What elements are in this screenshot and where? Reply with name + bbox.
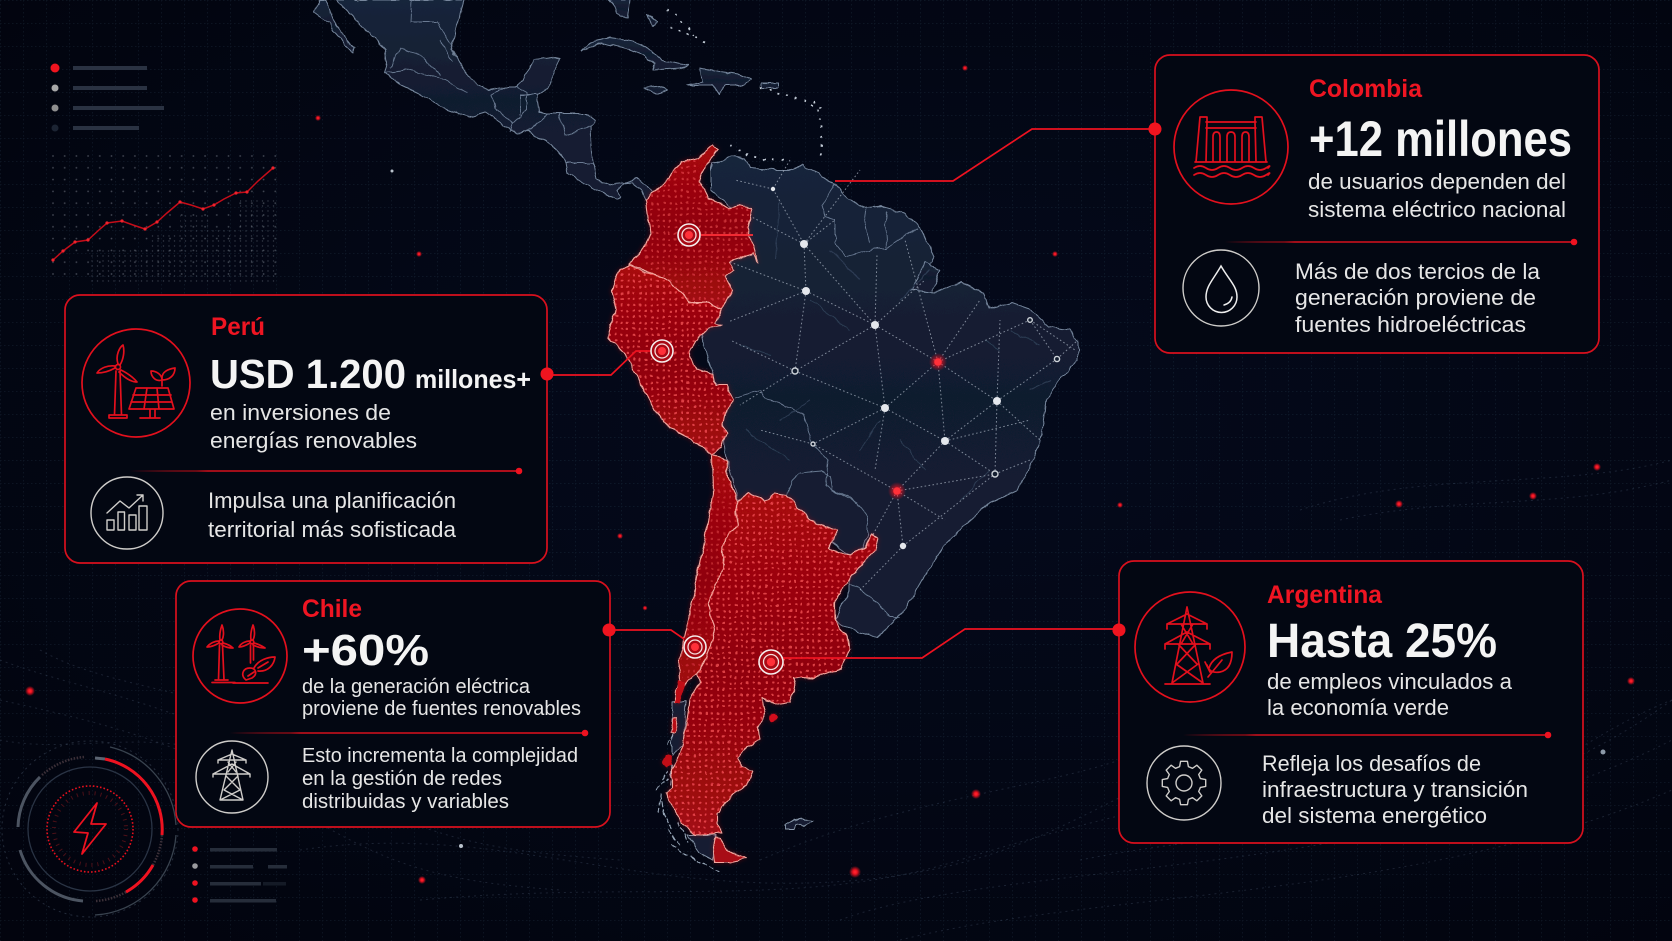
icon: water drop — [1183, 250, 1259, 326]
legend: bottom left — [192, 846, 287, 903]
divider — [1183, 732, 1551, 738]
description: de empleos vinculados a — [1267, 669, 1513, 694]
marker: Peru — [651, 340, 673, 362]
supporting text: Impulsa una planificación — [208, 488, 456, 513]
supporting text — [1295, 259, 1541, 337]
supporting text — [1262, 751, 1528, 828]
description: de la generación eléctrica — [302, 675, 531, 698]
map: Chile — [662, 455, 747, 862]
key figure: millones+ — [415, 364, 531, 394]
icon: wind turbines and leaf — [193, 609, 287, 703]
map: energy network — [728, 160, 1078, 590]
marker: Colombia — [678, 224, 700, 246]
panel: Colombia — [1148, 55, 1599, 353]
supporting text: Más de dos tercios de la — [1295, 259, 1541, 284]
map: Argentina — [665, 493, 878, 835]
icon: growth chart — [91, 477, 163, 549]
panel: Argentina — [1112, 561, 1583, 843]
gauge: energy bolt — [2, 741, 178, 917]
description — [302, 675, 581, 720]
connector: Peru — [540, 351, 662, 380]
icon: wind turbine and solar panel — [82, 329, 190, 437]
description: de usuarios dependen del — [1308, 169, 1566, 194]
map: Mexico and Central America — [314, 0, 822, 200]
marker: Argentina — [759, 650, 783, 674]
key figure: USD 1.200 — [210, 351, 406, 397]
description: sistema eléctrico nacional — [1308, 197, 1566, 222]
icon: hydroelectric dam — [1174, 90, 1288, 204]
supporting text: Refleja los desafíos de — [1262, 751, 1481, 776]
connector: Chile — [602, 624, 684, 639]
supporting text: fuentes hidroeléctricas — [1295, 312, 1526, 337]
panel: Chile — [176, 581, 616, 827]
supporting text: del sistema energético — [1262, 803, 1487, 828]
description: en inversiones de — [210, 400, 391, 425]
panel: Peru — [65, 295, 554, 563]
divider — [230, 730, 588, 736]
icon: transmission tower — [196, 741, 268, 813]
connector: Argentina — [771, 624, 1126, 658]
supporting text: Esto incrementa la complejidad — [302, 744, 578, 767]
supporting text: en la gestión de redes — [302, 767, 502, 790]
supporting text — [208, 488, 457, 542]
map: Brazil and neighbouring countries — [700, 156, 1078, 637]
supporting text: generación proviene de — [1295, 285, 1536, 310]
description: energías renovables — [210, 428, 417, 453]
supporting text: infraestructura y transición — [1262, 777, 1528, 802]
description — [210, 400, 417, 453]
description: proviene de fuentes renovables — [302, 697, 581, 720]
country name: Perú — [211, 313, 265, 341]
divider — [1225, 239, 1577, 245]
country name: Chile — [302, 595, 362, 623]
country name: Colombia — [1309, 75, 1423, 103]
line chart: top left — [51, 155, 280, 283]
map: Peru — [608, 265, 734, 455]
connector: Colombia — [701, 122, 1162, 235]
supporting text: territorial más sofisticada — [208, 517, 457, 542]
map: Colombia — [629, 145, 758, 308]
legend: top left — [50, 64, 164, 132]
key figure: +60% — [302, 626, 429, 675]
supporting text — [302, 744, 578, 813]
description — [1308, 169, 1566, 222]
key figure: Hasta 25% — [1267, 615, 1497, 668]
description: la economía verde — [1267, 695, 1449, 720]
key figure: +12 millones — [1309, 111, 1572, 167]
map: southern islands — [656, 700, 813, 872]
country name: Argentina — [1267, 581, 1383, 609]
supporting text: distribuidas y variables — [302, 790, 509, 813]
icon: tower and leaf — [1135, 592, 1245, 702]
marker: Chile — [684, 636, 706, 658]
icon: gear — [1147, 746, 1221, 820]
description — [1267, 669, 1513, 720]
key figure — [210, 351, 531, 397]
divider — [130, 468, 522, 474]
